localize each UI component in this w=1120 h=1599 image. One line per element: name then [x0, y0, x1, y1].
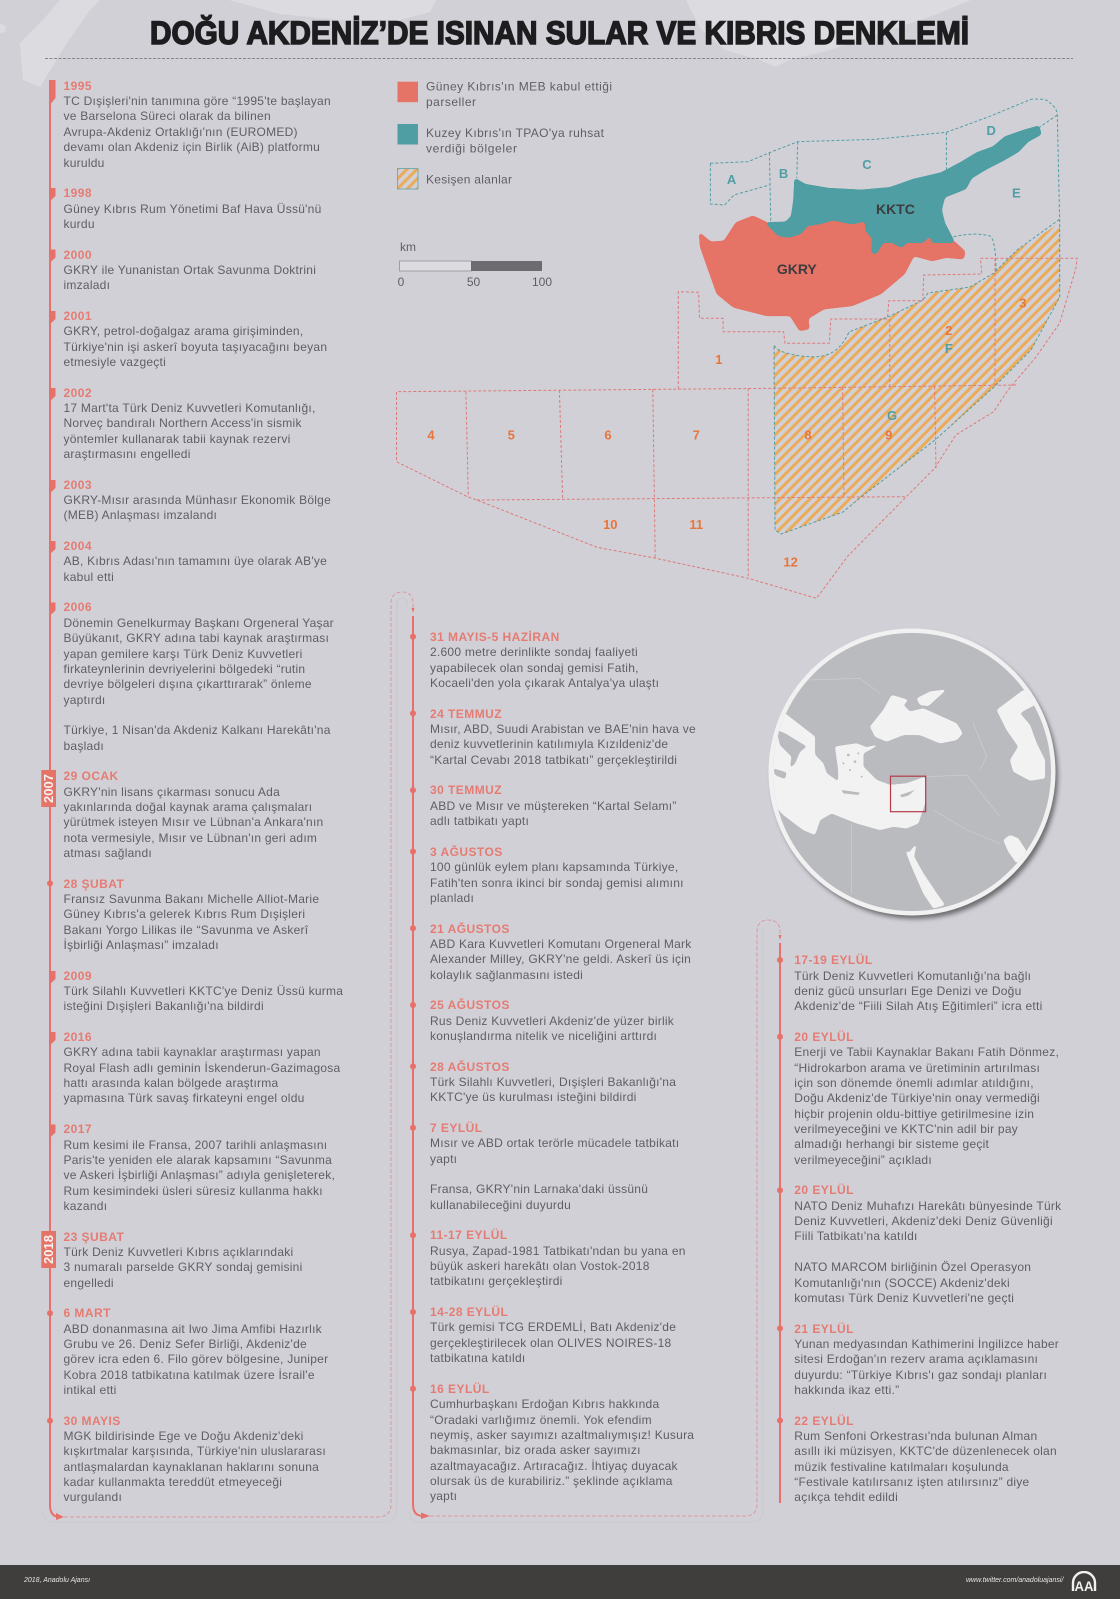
event 22 Eylül: 22 EYLÜL	[794, 1414, 854, 1428]
event 22 Eylül: Rum Senfoni Orkestrası'nda bulunan Alman	[794, 1429, 1037, 1443]
event 28 Ağustos: 28 AĞUSTOS	[430, 1060, 510, 1074]
event 2009: 2009	[64, 969, 92, 983]
event 20 Eylül: NATO: Fiili Tatbikatı'na katıldı	[794, 1229, 918, 1243]
event 2001: etmesiyle vazgeçti	[64, 355, 166, 369]
title: DOĞU AKDENİZ’DE ISINAN SULAR VE KIBRIS DENKLEMİ	[150, 15, 969, 51]
event 11-17 Eylül: Rusya, Zapad-1981 Tatbikatı'ndan bu yana en	[430, 1244, 686, 1258]
map labels: 10	[603, 517, 618, 532]
legend: Kuzey Kıbrıs'ın TPAO'ya ruhsat	[426, 126, 605, 140]
legend	[398, 80, 612, 189]
event 17-19 Eylül	[794, 953, 1042, 1013]
event 14-28 Eylül: gerçekleştirilecek olan OLIVES NOIRES-18	[430, 1336, 671, 1350]
event 2017	[64, 1122, 335, 1213]
event 2006: Türkiye, 1 Nisan'da Akdeniz Kalkanı Harekâtı'na	[64, 723, 331, 737]
event 16 Eylül	[430, 1382, 694, 1503]
event 7 Eylül	[430, 1121, 679, 1212]
event 7 Eylül: 7 EYLÜL	[430, 1121, 482, 1135]
event 14-28 Eylül: tatbikatına katıldı	[430, 1351, 525, 1365]
event 25 Ağustos: konuşlandırma nitelik ve niceliğini arttırdı	[430, 1029, 657, 1043]
event 24 Temmuz: Mısır, ABD, Suudi Arabistan ve BAE'nin hava ve	[430, 722, 696, 736]
event 2002: araştırmasını engelledi	[64, 447, 191, 461]
event 2009: Türk Silahlı Kuvvetleri KKTC'ye Deniz Üssü kurma	[64, 984, 343, 998]
background map silhouettes	[0, 0, 971, 87]
event 2006: devriye bölgeleri dışına çıkarttırarak” önleme	[64, 677, 312, 691]
event 2017: kazandı	[64, 1199, 107, 1213]
timeline connector: right column	[777, 943, 783, 1503]
event 2002: Norveç bandıralı Northern Access'in sismik	[64, 416, 302, 430]
event 3 Ağustos: 3 AĞUSTOS	[430, 845, 503, 859]
event 30 Temmuz: ABD ve Mısır ve müştereken “Kartal Selamı”	[430, 799, 677, 813]
locator globe	[767, 628, 1058, 919]
event 2016: yapmasına Türk savaş firkateyni engel oldu	[64, 1091, 305, 1105]
event 29 Ocak 2007	[64, 769, 323, 860]
event 21 Eylül: 21 EYLÜL	[794, 1322, 854, 1336]
scale bar: km	[400, 240, 416, 254]
event 1995: 1995	[64, 79, 92, 93]
event 14-28 Eylül	[430, 1305, 676, 1365]
scale bar: 0	[398, 275, 405, 289]
event 29 Ocak 2007: GKRY'nin lisans çıkarması sonucu Ada	[64, 785, 280, 799]
map labels: KKTC	[876, 201, 915, 217]
event 31 Mayıs-5 Haziran: 31 MAYIS-5 HAZİRAN	[430, 630, 560, 644]
event 2006: başladı	[64, 739, 104, 753]
red locator square	[890, 776, 926, 812]
event 6 Mart 2018: 6 MART	[64, 1306, 111, 1320]
event 2001: GKRY, petrol-doğalgaz arama girişiminden,	[64, 324, 303, 338]
event 2006: Büyükanıt, GKRY adına tabi kaynak araştırması	[64, 631, 329, 645]
event 2017: 2017	[64, 1122, 92, 1136]
event 1995: TC Dışişleri'nin tanımına göre “1995'te başlayan	[64, 94, 331, 108]
event 21 Eylül: hakkında ikaz etti.”	[794, 1383, 899, 1397]
event 2001: Türkiye'nin işi askerî boyuta taşıyacağını beyan	[64, 340, 327, 354]
event 28 Şubat 2007: Fransız Savunma Bakanı Michelle Alliot-Marie	[64, 892, 319, 906]
event 30 Mayıs 2018: antlaşmalardan kaynaklanan haklarını sonuna	[64, 1460, 319, 1474]
event 31 Mayıs-5 Haziran: 2.600 metre derinlikte sondaj faaliyeti	[430, 645, 638, 659]
event 20 Eylül: Dönmez: için son dönemde önemli adımlar atıldığını,	[794, 1076, 1034, 1090]
event 20 Eylül: Dönmez: verilmeyeceğini” açıkladı	[794, 1153, 932, 1167]
event 2003: (MEB) Anlaşması imzalandı	[64, 508, 217, 522]
hatched overlap area	[774, 223, 1060, 534]
event 21 Ağustos: Alexander Milley, GKRY'ne geldi. Askerî üs için	[430, 952, 691, 966]
event 11-17 Eylül: 11-17 EYLÜL	[430, 1228, 508, 1242]
event 3 Ağustos: 100 günlük eylem planı kapsamında Türkiye,	[430, 860, 678, 874]
event 21 Ağustos	[430, 922, 692, 982]
timeline column: right	[794, 953, 1061, 1504]
map labels: 6	[604, 428, 612, 442]
event 16 Eylül: “Oradaki varlığımız önemli. Yok efendim	[430, 1413, 652, 1427]
event 21 Ağustos: ABD Kara Kuvvetleri Komutanı Orgeneral Mark	[430, 937, 692, 951]
event 2009	[64, 969, 343, 1013]
map labels: 7	[693, 428, 700, 442]
event 2016	[64, 1030, 340, 1105]
event 29 Ocak 2007: yakınlarında doğal kaynak arama çalışmaları	[64, 800, 312, 814]
event 7 Eylül: Fransa, GKRY'nin Larnaka'daki üssünü	[430, 1182, 648, 1196]
event 3 Ağustos	[430, 845, 684, 905]
event 16 Eylül: 16 EYLÜL	[430, 1382, 490, 1396]
event 28 Şubat 2007: Güney Kıbrıs'a gelerek Kıbrıs Rum Dışişleri	[64, 907, 305, 921]
event 2017: Rum kesimi ile Fransa, 2007 tarihli anlaşmasını	[64, 1138, 327, 1152]
event 30 Mayıs 2018	[64, 1414, 326, 1504]
event 2004: 2004	[64, 539, 92, 553]
map labels: 4	[427, 428, 435, 442]
event 2001	[64, 309, 327, 369]
event 29 Ocak 2007: 29 OCAK	[64, 769, 119, 783]
event 2003	[64, 478, 331, 522]
event 7 Eylül: yaptı	[430, 1152, 457, 1166]
event 2002: 2002	[64, 386, 92, 400]
event 1998: Güney Kıbrıs Rum Yönetimi Baf Hava Üssü'nü	[64, 202, 322, 216]
event 31 Mayıs-5 Haziran: Kocaeli'den yola çıkarak Antalya'ya ulaştı	[430, 676, 659, 690]
event 6 Mart 2018: Grubu ve 26. Deniz Sefer Birliği, Akdeniz'de	[64, 1337, 307, 1351]
event 23 Şubat 2018: 23 ŞUBAT	[64, 1230, 124, 1244]
map labels: 9	[885, 428, 892, 442]
event 21 Eylül	[794, 1322, 1059, 1397]
event 22 Eylül: asıllı iki müzisyen, KKTC'de düzenlenecek olan	[794, 1444, 1057, 1458]
event 22 Eylül: müzik festivaline katılmaları koşulunda	[794, 1460, 1009, 1474]
event 2002	[64, 386, 316, 461]
event 2004: AB, Kıbrıs Adası'nın tamamını üye olarak AB'ye	[64, 554, 327, 568]
event 1995: ve Barselona Süreci olarak da bilinen	[64, 109, 271, 123]
event 6 Mart 2018: görev icra eden 6. Filo görev bölgesine, Juniper	[64, 1352, 328, 1366]
event 24 Temmuz	[430, 707, 696, 767]
event 2006: firkateynlerinin devriyelerini bölgedeki “rutin	[64, 662, 305, 676]
timeline connector: left column	[42, 80, 414, 1522]
event 25 Ağustos: 25 AĞUSTOS	[430, 998, 510, 1012]
event 17-19 Eylül: Türk Deniz Kuvvetleri Komutanlığı'na bağlı	[794, 969, 1031, 983]
event 16 Eylül: azaltmayacağız. Artıracağız. İhtiyaç duyacak	[430, 1459, 678, 1473]
event 30 Temmuz	[430, 783, 677, 828]
event 23 Şubat 2018: engelledi	[64, 1276, 114, 1290]
event 20 Eylül: NATO: Komutanlığı'nın (SOCCE) Akdeniz'deki	[794, 1276, 1010, 1290]
event 14-28 Eylül: Türk gemisi TCG ERDEMLİ, Batı Akdeniz'de	[430, 1320, 676, 1334]
event 2006: Dönemin Genelkurmay Başkanı Orgeneral Yaşar	[64, 616, 334, 630]
event 28 Şubat 2007: İşbirliği Anlaşması” imzaladı	[64, 938, 219, 952]
event 22 Eylül	[794, 1414, 1057, 1504]
timeline connector: middle column	[409, 616, 782, 1522]
event 17-19 Eylül: 17-19 EYLÜL	[794, 953, 873, 967]
teal dashed licence zones	[710, 99, 1060, 534]
event 20 Eylül: Dönmez: Enerji ve Tabii Kaynaklar Bakanı Fatih Dönmez,	[794, 1045, 1059, 1059]
event 2016: 2016	[64, 1030, 92, 1044]
event 14-28 Eylül: 14-28 EYLÜL	[430, 1305, 508, 1319]
event 22 Eylül: açıkça tehdit edildi	[794, 1490, 898, 1504]
event 2006: yapan gemilere karşı Türk Deniz Kuvvetleri	[64, 647, 303, 661]
event 2017: ve Askeri İşbirliği Anlaşması” adıyla genişleterek,	[64, 1168, 335, 1182]
event 20 Eylül: Dönmez: almadığı herhangi bir sisteme geçit	[794, 1137, 989, 1151]
map labels: 5	[508, 428, 515, 442]
event 11-17 Eylül: büyük askeri harekâtı olan Vostok-2018	[430, 1259, 650, 1273]
map labels: C	[862, 157, 872, 172]
timeline column: middle	[430, 630, 696, 1503]
event 17-19 Eylül: Akdeniz'de “Fiili Silah Atış Eğitimleri” icra etti	[794, 999, 1042, 1013]
event 2002: yöntemler kullanarak tabii kaynak rezervi	[64, 432, 291, 446]
year tag 2018: 2018	[41, 1235, 56, 1264]
event 20 Eylül: Dönmez: 20 EYLÜL	[794, 1030, 854, 1044]
event 1998: 1998	[64, 186, 92, 200]
event 21 Eylül: Yunan medyasından Kathimerini İngilizce haber	[794, 1337, 1059, 1351]
map labels: 8	[804, 428, 812, 442]
map labels: B	[779, 166, 788, 181]
event 22 Eylül: “Festivale katılırsanız işten atılırsınız” diye	[794, 1475, 1029, 1489]
Güney Kıbrıs landmass	[700, 217, 964, 330]
event 21 Ağustos: 21 AĞUSTOS	[430, 922, 510, 936]
event 30 Mayıs 2018: vurgulandı	[64, 1490, 122, 1504]
event 2009: isteğini Dışişleri Bakanlığı'na bildirdi	[64, 999, 264, 1013]
event 16 Eylül: yaptı	[430, 1489, 457, 1503]
event 2016: hattı arasında kalan bölgede araştırma	[64, 1076, 278, 1090]
scale bar	[398, 240, 552, 289]
event 2003: 2003	[64, 478, 92, 492]
event 2017: Rum kesimindeki üsleri süresiz kullanma hakkı	[64, 1184, 323, 1198]
footer credit: 2018, Anadolu Ajansı	[24, 1577, 90, 1584]
event 6 Mart 2018: Kobra 2018 tatbikatına katılmak üzere İsrail'e	[64, 1368, 315, 1382]
event 1995	[64, 79, 331, 170]
event 2016: GKRY adına tabii kaynaklar araştırması yapan	[64, 1045, 321, 1059]
event 29 Ocak 2007: atması sağlandı	[64, 846, 152, 860]
event 24 Temmuz: “Kartal Cevabı 2018 tatbikatı” gerçekleştirildi	[430, 753, 677, 767]
event 20 Eylül: Dönmez: hiçbir projenin oldu-bittiye getirilmesine izin	[794, 1107, 1034, 1121]
pink dashed MEB parcels	[396, 258, 1077, 598]
event 23 Şubat 2018: 3 numaralı parselde GKRY sondaj gemisini	[64, 1260, 303, 1274]
map labels: 11	[689, 517, 703, 532]
map labels: 1	[715, 352, 723, 367]
event 16 Eylül: bakmasınlar, biz orada asker sayımızı	[430, 1443, 641, 1457]
event 23 Şubat 2018	[64, 1230, 303, 1290]
event 25 Ağustos	[430, 998, 674, 1043]
event 7 Eylül: kullanabileceğini duyurdu	[430, 1198, 571, 1212]
event 29 Ocak 2007: yürütmek isteyen Mısır ve Lübnan'a Ankara'nın	[64, 815, 323, 829]
event 1998: kurdu	[64, 217, 95, 231]
event 2003: GKRY-Mısır arasında Münhasır Ekonomik Bölge	[64, 493, 331, 507]
event 6 Mart 2018: ABD donanmasına ait Iwo Jima Amfibi Hazırlık	[64, 1322, 322, 1336]
event 24 Temmuz: 24 TEMMUZ	[430, 707, 502, 721]
event 29 Ocak 2007: nota vermesiyle, Mısır ve Lübnan'ın geri adım	[64, 831, 317, 845]
event 2000	[64, 248, 316, 292]
event 28 Şubat 2007: Bakanı Yorgo Lilikas ile “Savunma ve Askerî	[64, 923, 308, 937]
event 2000: GKRY ile Yunanistan Ortak Savunma Doktrini	[64, 263, 316, 277]
event 1995: devamı olan Akdeniz için Birlik (AiB) platformu	[64, 140, 320, 154]
year flags	[47, 80, 56, 1424]
event 28 Ağustos: KKTC'ye üs kurulması isteğini bildirdi	[430, 1090, 637, 1104]
map labels: 3	[1019, 296, 1027, 310]
KKTC landmass	[767, 127, 1040, 253]
event 2004	[64, 539, 327, 584]
event 7 Eylül: Mısır ve ABD ortak terörle mücadele tatbikatı	[430, 1136, 679, 1150]
legend: verdiği bölgeler	[426, 142, 517, 156]
event 2016: Royal Flash adlı geminin İskenderun-Gazimagosa	[64, 1061, 340, 1075]
scale bar: 100	[532, 275, 552, 289]
event 31 Mayıs-5 Haziran	[430, 630, 659, 690]
event 28 Şubat 2007: 28 ŞUBAT	[64, 877, 124, 891]
event 20 Eylül: NATO: 20 EYLÜL	[794, 1183, 854, 1197]
event 20 Eylül: Dönmez: “Hidrokarbon arama ve üretiminin artırılması	[794, 1061, 1040, 1075]
legend: Güney Kıbrıs'ın MEB kabul ettiği	[426, 80, 612, 94]
event 1995: kuruldu	[64, 156, 105, 170]
event 2000: 2000	[64, 248, 92, 262]
event 20 Eylül: NATO: komutası Türk Deniz Kuvvetleri'ne geçti	[794, 1291, 1014, 1305]
event 2002: 17 Mart'ta Türk Deniz Kuvvetleri Komutanlığı,	[64, 401, 316, 415]
event 3 Ağustos: Fatih'ten sonra ikinci bir sondaj gemisi alımını	[430, 876, 684, 890]
legend: parseller	[426, 95, 476, 109]
event 30 Temmuz: adlı tatbikatı yaptı	[430, 814, 529, 828]
event 16 Eylül: Cumhurbaşkanı Erdoğan Kıbrıs hakkında	[430, 1397, 659, 1411]
map labels	[427, 123, 1027, 570]
event 2004: kabul etti	[64, 570, 114, 584]
event 31 Mayıs-5 Haziran: yapabilecek olan sondaj gemisi Fatih,	[430, 661, 639, 675]
event 16 Eylül: neymiş, asker sayımızı azaltmalıymışız! Kusura	[430, 1428, 694, 1442]
event 30 Mayıs 2018: MGK bildirisinde Ege ve Doğu Akdeniz'deki	[64, 1429, 304, 1443]
scale bar: 50	[467, 275, 480, 289]
event 20 Eylül: NATO	[794, 1183, 1061, 1305]
map labels: GKRY	[777, 261, 817, 277]
event 2001: 2001	[64, 309, 92, 323]
map labels: A	[727, 172, 737, 187]
event 20 Eylül: Dönmez: Doğu Akdeniz'de Türkiye'nin onay vermediği	[794, 1091, 1040, 1105]
map labels: 2	[945, 323, 952, 338]
timeline column: left	[64, 79, 343, 1504]
event 21 Eylül: duyurdu: “Türkiye Kıbrıs'ı gaz sondajı planları	[794, 1368, 1047, 1382]
event 2006: yaptırdı	[64, 693, 106, 707]
event 23 Şubat 2018: Türk Deniz Kuvvetleri Kıbrıs açıklarındaki	[64, 1245, 293, 1259]
event 11-17 Eylül	[430, 1228, 686, 1288]
event 21 Eylül: sitesi Erdoğan'ın rezerv arama açıklamasını	[794, 1352, 1038, 1366]
event 30 Temmuz: 30 TEMMUZ	[430, 783, 502, 797]
event 1998	[64, 186, 322, 231]
map: Cyprus and maritime blocks	[396, 99, 1077, 598]
event 3 Ağustos: planladı	[430, 891, 474, 905]
footer link: www.twitter.com/anadoluajansi/	[966, 1577, 1063, 1584]
event 30 Mayıs 2018: 30 MAYIS	[64, 1414, 121, 1428]
event 28 Ağustos: Türk Silahlı Kuvvetleri, Dışişleri Bakanlığı'na	[430, 1075, 676, 1089]
map labels: D	[987, 123, 996, 138]
event 20 Eylül: NATO: NATO MARCOM birliğinin Özel Operasyon	[794, 1260, 1031, 1274]
year tag 2007: 2007	[41, 774, 56, 803]
map labels: G	[887, 408, 897, 423]
event 20 Eylül: Dönmez	[794, 1030, 1059, 1167]
event 21 Ağustos: kolaylık sağlanmasını istedi	[430, 968, 583, 982]
legend: Kesişen alanlar	[426, 172, 512, 186]
map labels: F	[945, 341, 953, 356]
event 28 Ağustos	[430, 1060, 676, 1104]
map labels: 12	[783, 554, 798, 570]
icon: Anadolu Agency logo	[1072, 1571, 1096, 1593]
event 16 Eylül: olursak üs de kurabiliriz.” şeklinde açıklama	[430, 1474, 673, 1488]
event 11-17 Eylül: tatbikatını gerçekleştirdi	[430, 1274, 563, 1288]
event 2006: 2006	[64, 600, 92, 614]
event 2000: imzaladı	[64, 278, 110, 292]
event 24 Temmuz: deniz kuvvetlerinin katılımıyla Kızıldeniz'de	[430, 737, 668, 751]
event 20 Eylül: NATO: NATO Deniz Muhafızı Harekâtı bünyesinde Türk	[794, 1199, 1061, 1213]
event 25 Ağustos: Rus Deniz Kuvvetleri Akdeniz'de yüzer birlik	[430, 1014, 674, 1028]
map labels: E	[1012, 186, 1021, 200]
event 20 Eylül: NATO: Deniz Kuvvetleri, Akdeniz'deki Deniz Güvenliği	[794, 1214, 1053, 1228]
event 17-19 Eylül: deniz gücü unsurları Ege Denizi ve Doğu	[794, 984, 1022, 998]
event 20 Eylül: Dönmez: verilmeyeceğini ve KKTC'nin adil bir pay	[794, 1122, 1018, 1136]
event 6 Mart 2018	[64, 1306, 328, 1397]
event 30 Mayıs 2018: kadar kullanmakta tereddüt etmeyeceği	[64, 1475, 282, 1489]
event 6 Mart 2018: intikal etti	[64, 1383, 117, 1397]
event 1995: Avrupa-Akdeniz Ortaklığı'nın (EUROMED)	[64, 125, 298, 139]
footer bar	[0, 1565, 1120, 1599]
event 2017: Paris'te yeniden ele alarak kapsamını “Savunma	[64, 1153, 332, 1167]
event 30 Mayıs 2018: kışkırtmalar karşısında, Türkiye'nin uluslararası	[64, 1444, 326, 1458]
event 28 Şubat 2007	[64, 877, 319, 952]
event 2006	[64, 600, 334, 753]
